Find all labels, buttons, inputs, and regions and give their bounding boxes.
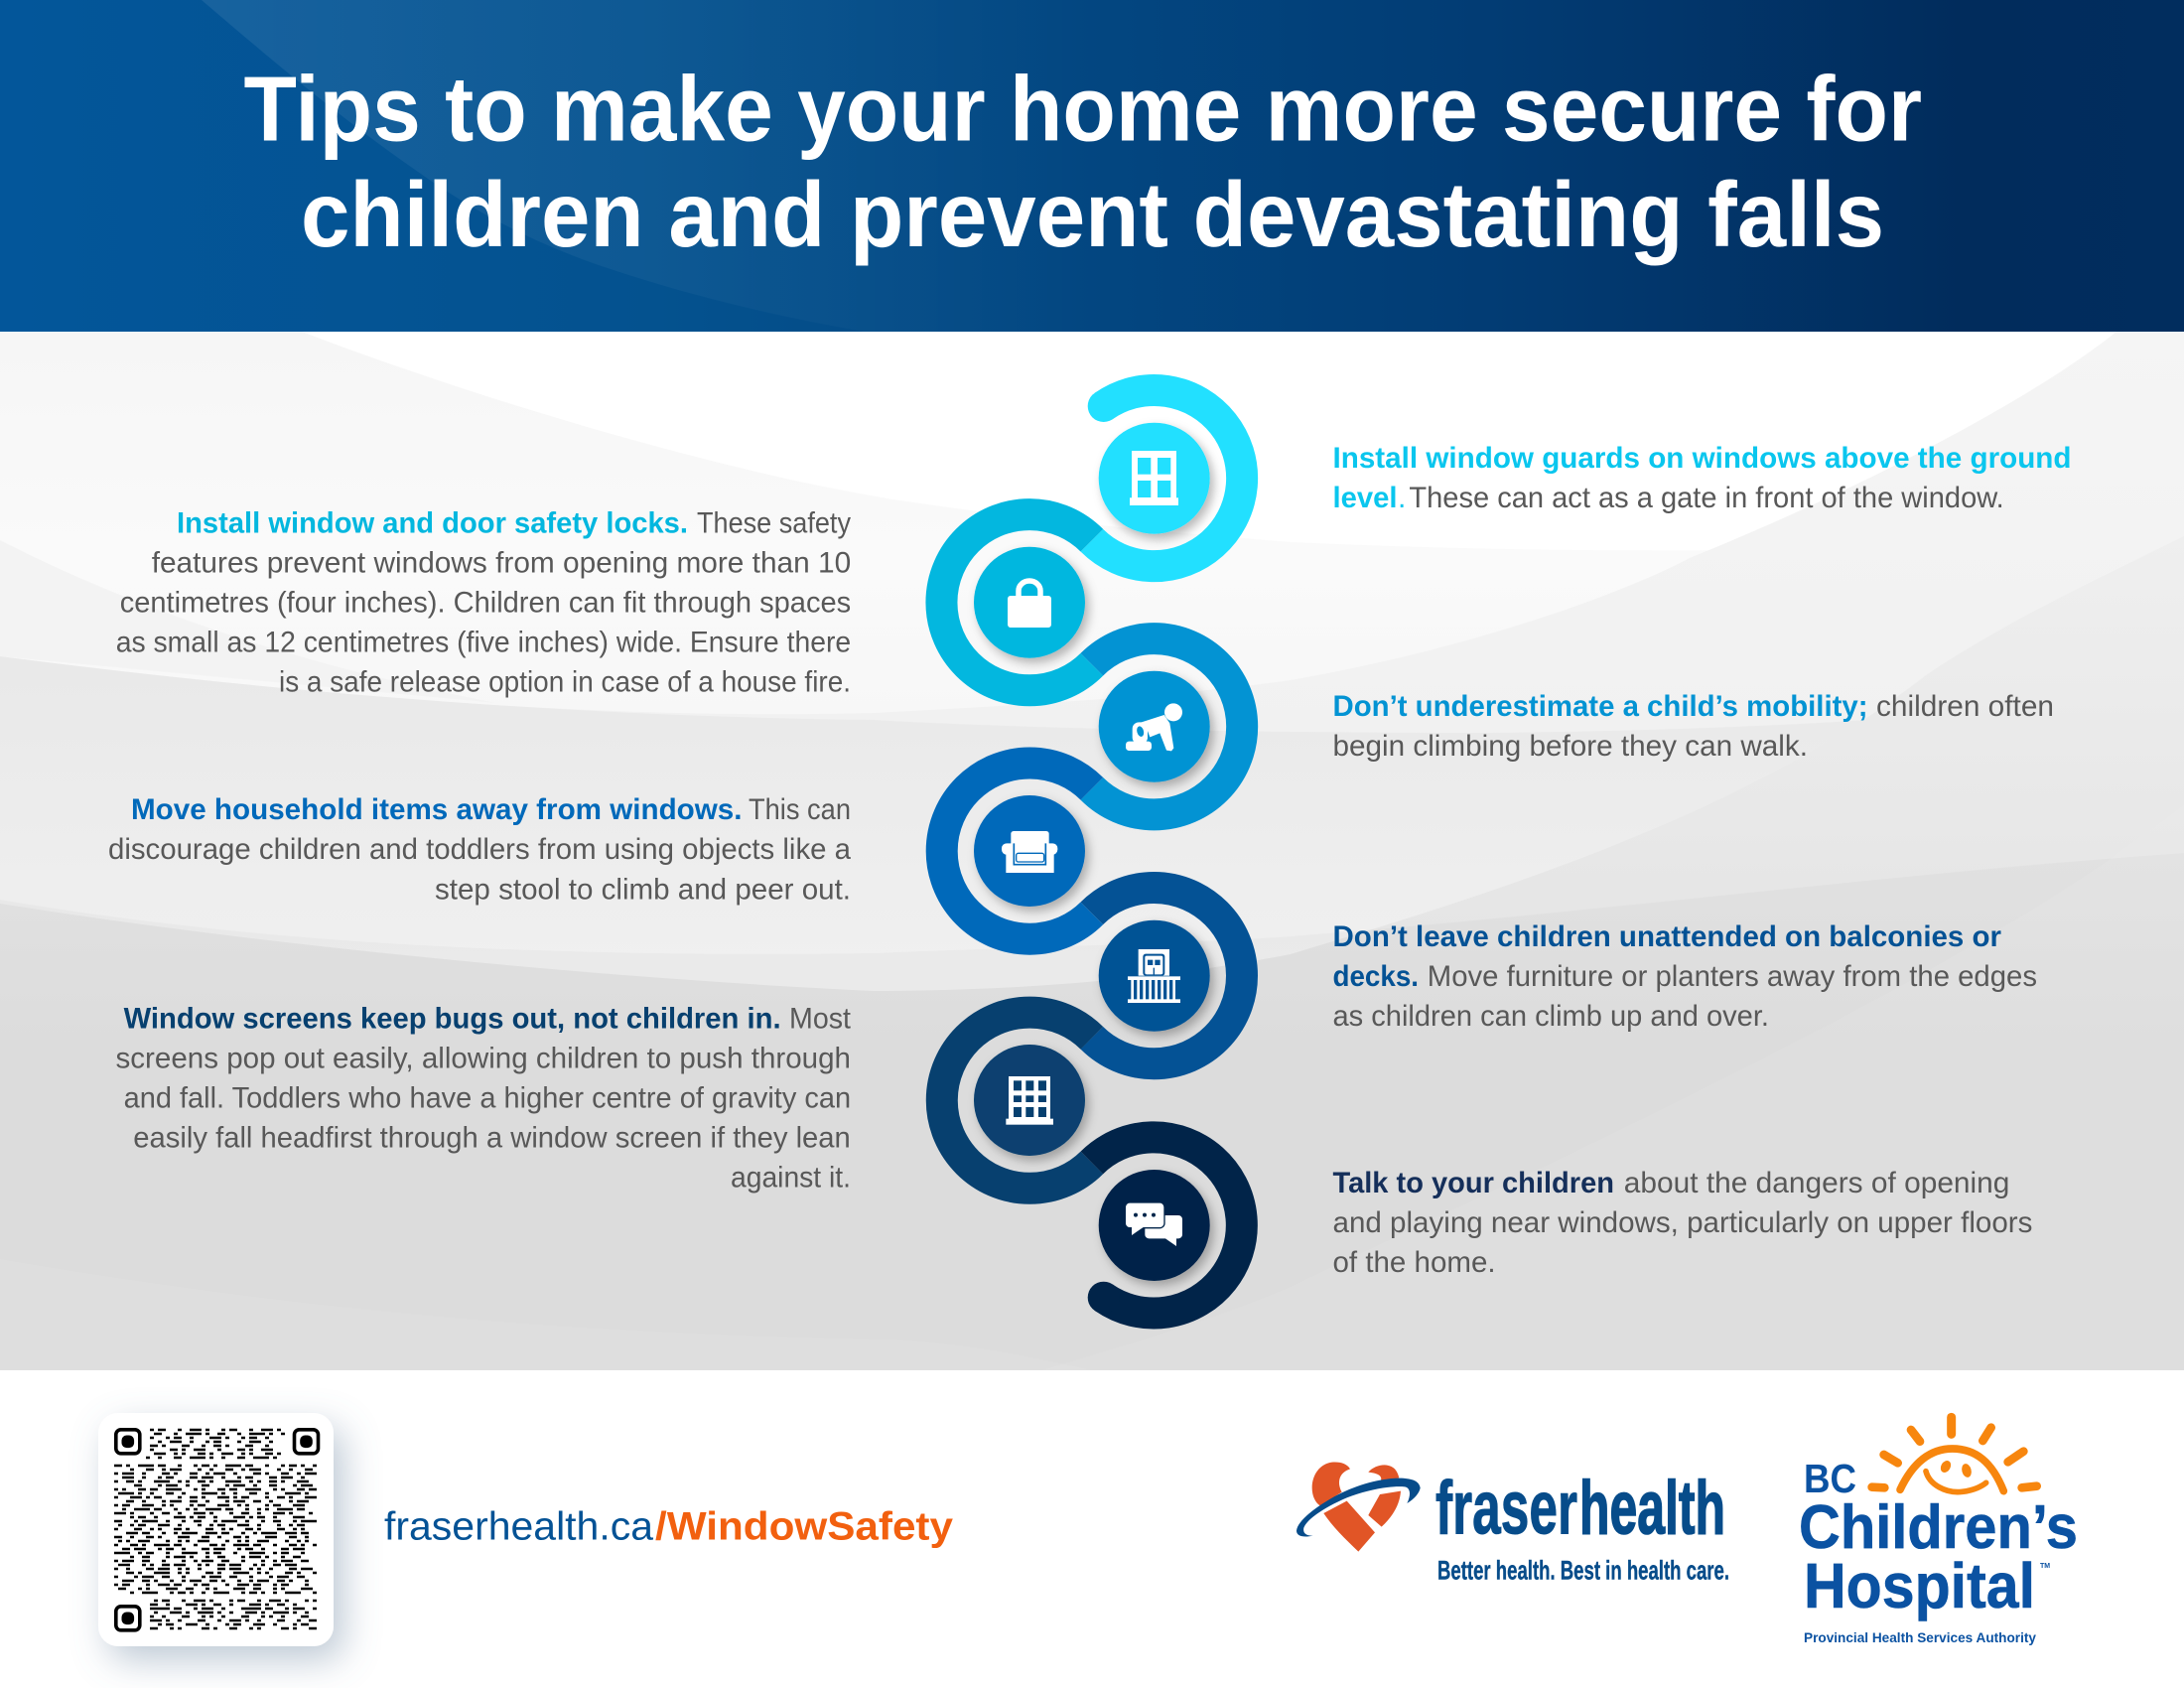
left text: window and door safety locks: centimetres (four inches). Children can fit through spaces: [120, 587, 851, 620]
QR code card: [98, 1413, 334, 1646]
logo: BC Children's Hospital: Provincial Health Services Authority: [1804, 1629, 2036, 1645]
heading: safety locks: Install window and door safety locks.: [177, 507, 688, 540]
right text: balconies and decks: decks.: [1332, 960, 1419, 993]
right text: balconies and decks: [1332, 920, 2037, 1033]
right text: talk to your children: and playing near windows, particularly on upper floors: [1332, 1206, 2032, 1239]
left text: window and door safety locks: features prevent windows from opening more than 10: [152, 547, 851, 580]
heading: window screens: Window screens keep bugs out, not children in.: [124, 1003, 781, 1035]
logo: BC Children's Hospital: Hospital: [1804, 1550, 2035, 1621]
icon: window: [1099, 423, 1210, 534]
logo: BC Children's Hospital: [1799, 1417, 2078, 1645]
QR finder patterns: [116, 1430, 318, 1630]
left text: window and door safety locks: These safety: [697, 507, 851, 540]
left text: move household items: step stool to climb and peer out.: [435, 874, 851, 906]
icon: armchair: [974, 795, 1085, 907]
left text: window screens: Most: [789, 1003, 852, 1035]
logo: BC Children's Hospital: Children’s: [1799, 1493, 2078, 1562]
icon: smiling sun: [1872, 1417, 2037, 1492]
left text: window and door safety locks: as small as 12 centimetres (five inches) wide. Ensure there: [116, 627, 851, 659]
left text: move household items: [108, 793, 851, 906]
heading: talk to children: Talk to your children: [1332, 1167, 1614, 1199]
left text: window screens: against it.: [731, 1162, 851, 1194]
heading: balconies: Don’t leave children unattended on balconies or: [1332, 920, 2001, 953]
left text: window and door safety locks: [116, 507, 851, 699]
icon: apartment window grid: [974, 1045, 1085, 1156]
logo: BC Children's Hospital: BC: [1804, 1456, 1856, 1501]
right text: window guards: level: [1332, 482, 1398, 514]
heading: child mobility: Don’t underestimate a child’s mobility;: [1332, 690, 1868, 723]
website URL: /WindowSafety: [655, 1505, 954, 1549]
left text: move household items: This can: [749, 793, 851, 826]
icon: balcony: [1099, 920, 1210, 1032]
right text: child mobility: children often: [1876, 690, 2054, 723]
right text: talk to your children: of the home.: [1332, 1246, 1496, 1279]
website URL: [384, 1505, 954, 1549]
logo: Fraser Health: health: [1579, 1466, 1725, 1550]
heading: window guards: Install window guards on windows above the ground: [1332, 442, 2071, 475]
panel: wavy grey background: [0, 332, 2184, 1370]
icon: speech bubbles: [1099, 1170, 1210, 1281]
left text: window screens: [115, 1003, 852, 1194]
left text: window screens: and fall. Toddlers who have a higher centre of gravity can: [124, 1082, 851, 1114]
heading: household items: Move household items away from windows.: [131, 793, 743, 826]
icon: crawling baby: [1099, 671, 1210, 782]
right text: window guards: .: [1398, 482, 1406, 514]
right text: window guards: These can act as a gate in front of the window.: [1409, 482, 2004, 514]
right text: window guards: [1332, 442, 2071, 514]
right text: child mobility: begin climbing before they can walk.: [1332, 730, 1808, 763]
logo: Fraser Health: fraser: [1435, 1466, 1577, 1550]
right text: balconies and decks: as children can climb up and over.: [1332, 1000, 1769, 1033]
spiral timeline ribbon: [941, 390, 1242, 1314]
icon: padlock: [974, 547, 1085, 658]
QR modules: [114, 1430, 317, 1628]
website URL: fraserhealth.ca: [384, 1505, 654, 1549]
title: [244, 58, 1922, 266]
left text: window screens: easily fall headfirst through a window screen if they lean: [133, 1122, 851, 1154]
right text: balconies and decks: Move furniture or planters away from the edges: [1428, 960, 2037, 993]
title: children and prevent devastating falls: [301, 163, 1884, 266]
left text: window screens: screens pop out easily, allowing children to push through: [115, 1043, 851, 1074]
title: Tips to make your home more secure for: [244, 58, 1922, 161]
left text: move household items: discourage children and toddlers from using objects like a: [108, 833, 851, 866]
logo: BC Children's Hospital: TM: [2040, 1563, 2050, 1570]
left text: window and door safety locks: is a safe release option in case of a house fire.: [279, 666, 851, 699]
icon: heart and swoosh: [1297, 1463, 1421, 1552]
right text: talk to your children: [1332, 1167, 2032, 1279]
right text: child mobility: [1332, 690, 2054, 763]
logo: Fraser Health: Better health. Best in health care.: [1437, 1556, 1729, 1586]
header banner background: [0, 0, 2184, 332]
right text: talk to your children: about the dangers of opening: [1624, 1167, 2009, 1199]
logo: Fraser Health: [1297, 1463, 1729, 1586]
